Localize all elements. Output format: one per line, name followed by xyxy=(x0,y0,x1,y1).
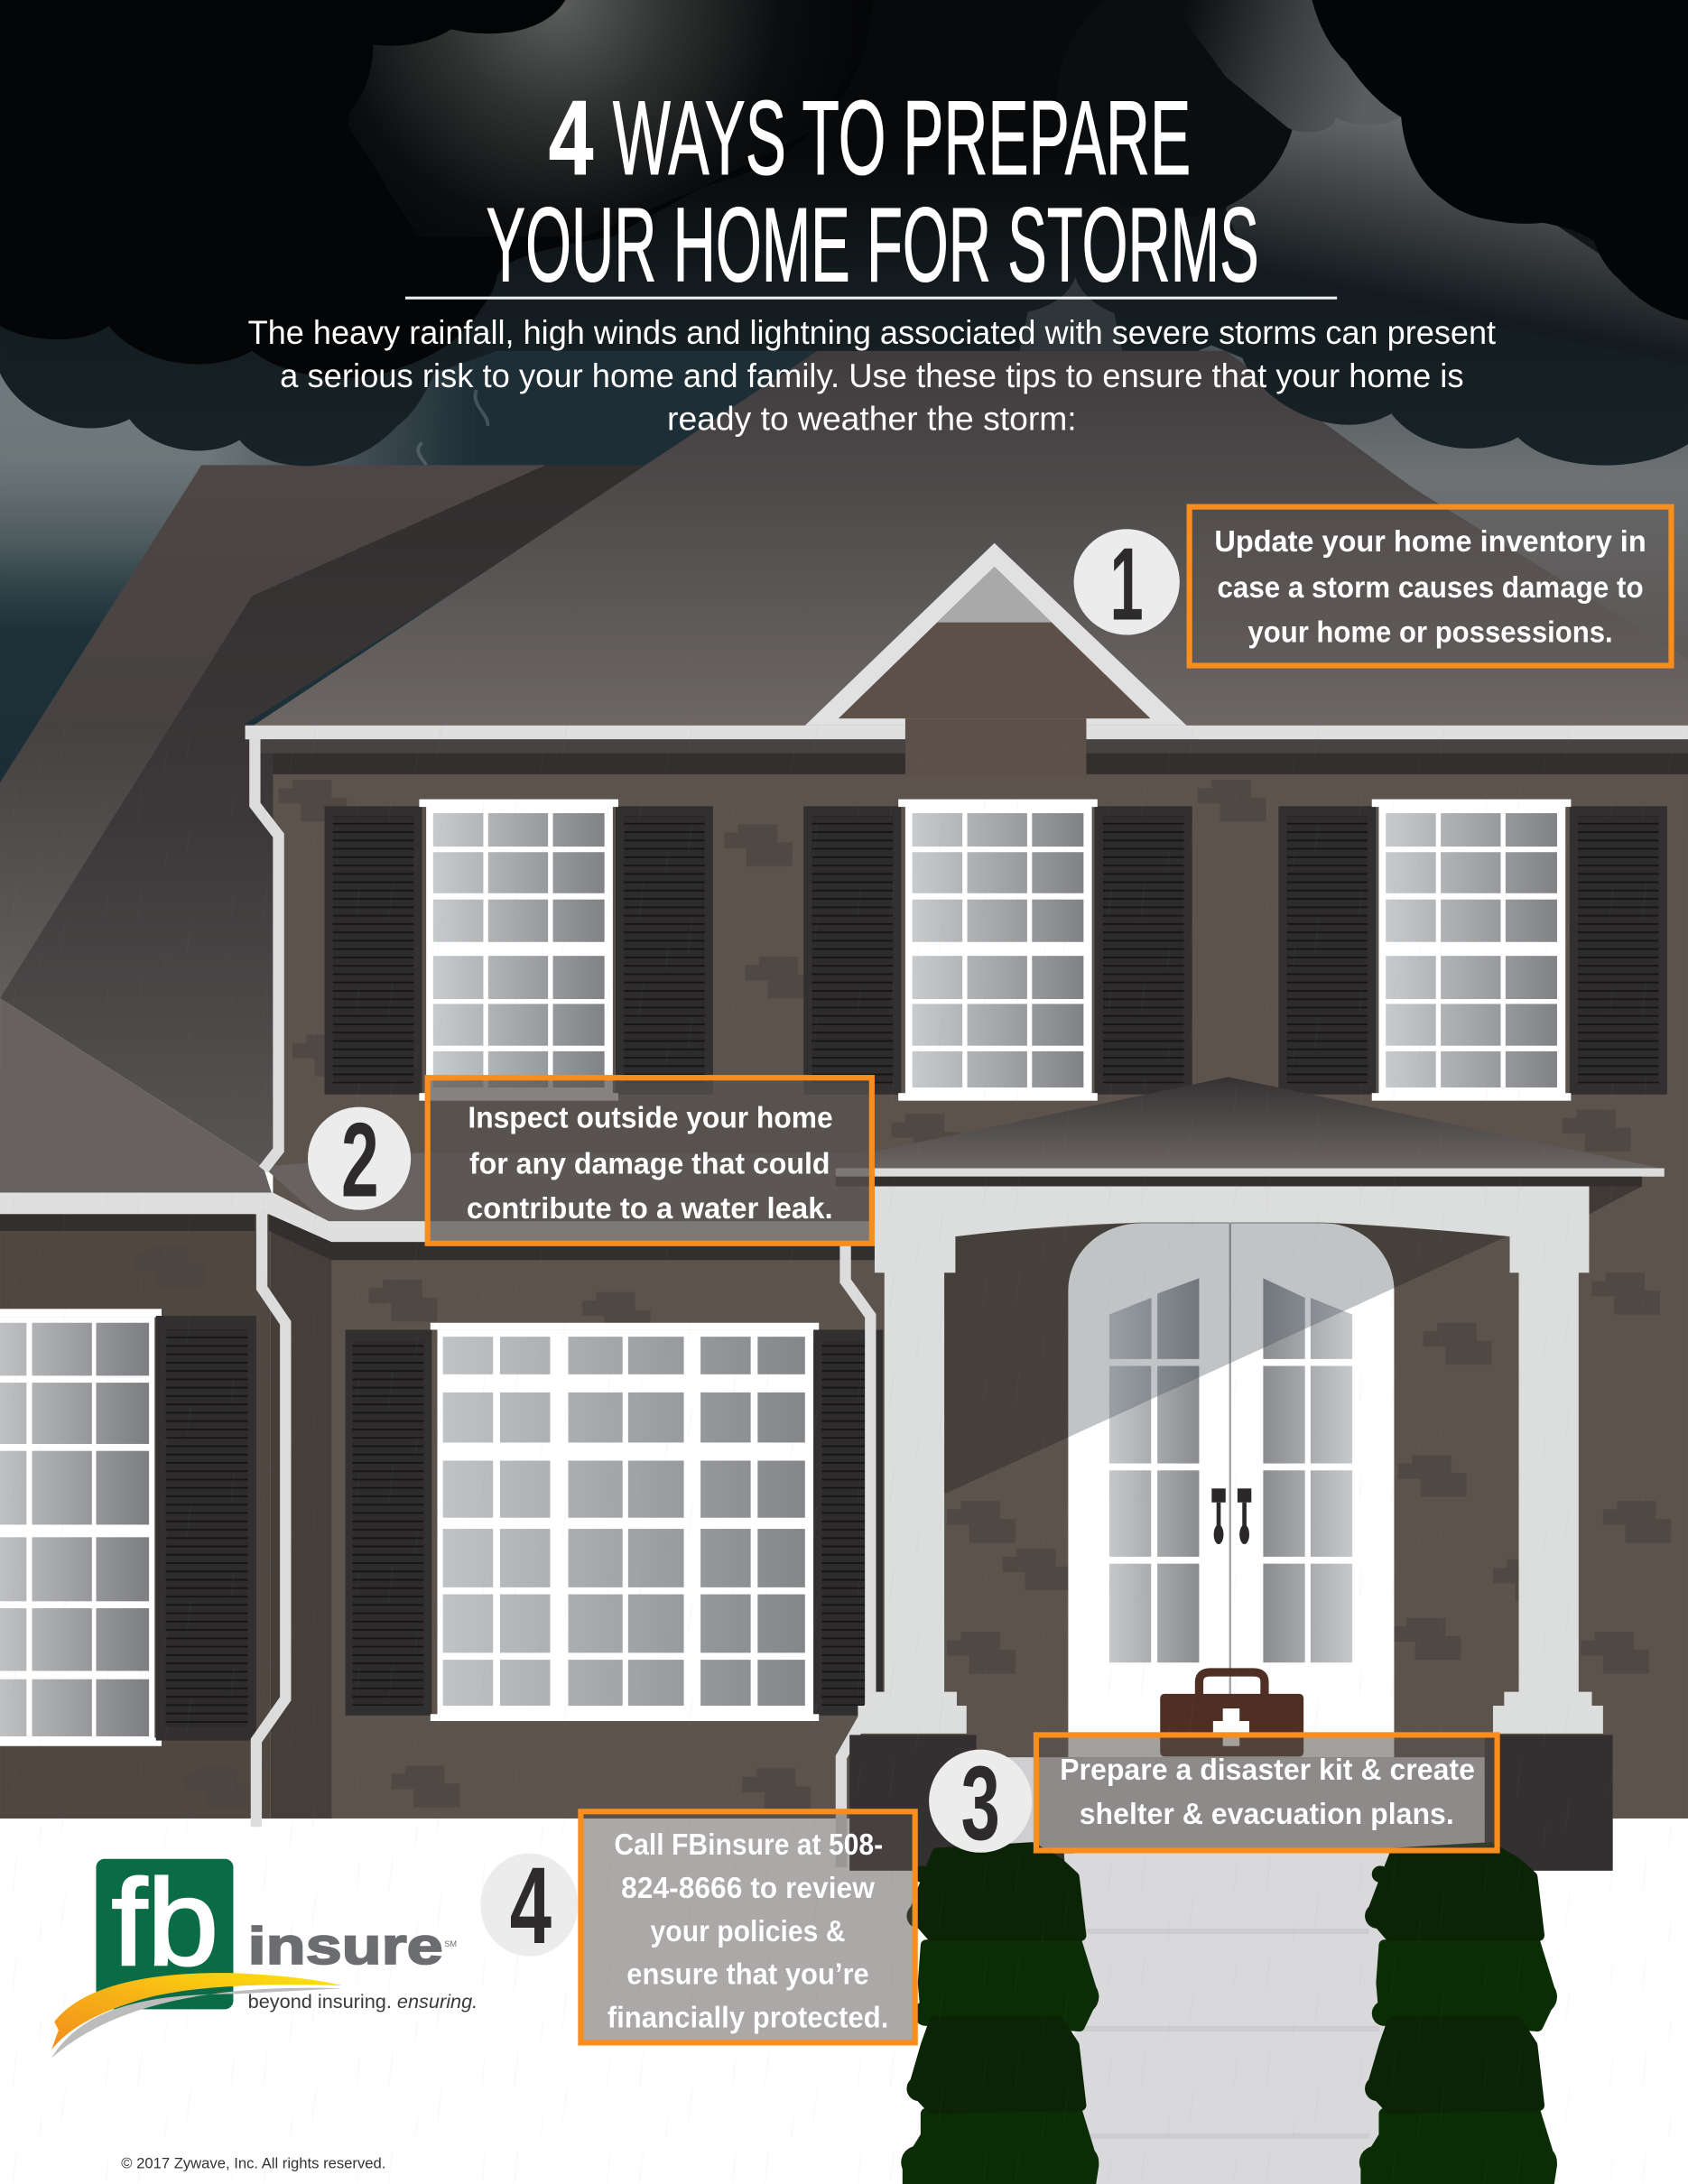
tip 4 xyxy=(480,1811,915,2042)
door panes right xyxy=(1263,1278,1352,1662)
number badge 2: 2 xyxy=(341,1100,379,1218)
roof: dark valley strip xyxy=(0,465,654,1167)
wall: main brick xyxy=(273,752,1688,1818)
cloud: upper right grey gap xyxy=(1170,0,1401,132)
cloud: top left black lobes xyxy=(0,0,565,195)
brick patches xyxy=(135,780,1671,1810)
callout text 2: for any damage that could xyxy=(469,1148,830,1181)
cloud: lower right grey gap xyxy=(1226,111,1688,365)
callout text 4: ensure that you’re xyxy=(626,1958,869,1992)
house walls xyxy=(0,752,1688,1818)
window 2 xyxy=(803,800,1192,1101)
logo green tile xyxy=(96,1859,233,2009)
callout text 2: contribute to a water leak. xyxy=(467,1192,833,1226)
gable fill xyxy=(805,543,1187,726)
gable and main eaves xyxy=(246,543,1688,777)
rain overlay xyxy=(0,724,1688,2183)
tip 1 xyxy=(1074,507,1671,665)
callout text 1: your home or possessions. xyxy=(1247,615,1613,649)
callout text 4: your policies & xyxy=(651,1915,846,1948)
title rule xyxy=(405,297,1337,300)
callout box 1 xyxy=(1190,507,1671,665)
door xyxy=(1068,1222,1394,1757)
door panes left xyxy=(1109,1278,1199,1662)
number badge 1 xyxy=(1074,528,1180,643)
ground xyxy=(0,1817,1688,2184)
logo swoosh shadow xyxy=(51,1988,343,2058)
callout text 4: 824-8666 to review xyxy=(621,1872,875,1905)
number badge 1: 1 xyxy=(1110,528,1144,643)
callout text 1: Update your home inventory in xyxy=(1214,525,1646,559)
logo wordmark: insure xyxy=(248,1918,443,1976)
cloud: main black bank xyxy=(0,0,873,378)
porch xyxy=(793,1077,1665,1757)
callout box 2 xyxy=(428,1078,872,1244)
cloud: rear teal bank xyxy=(0,0,1688,466)
cloud: front black right xyxy=(1312,0,1688,320)
cloud: grey peak behind title xyxy=(1019,277,1123,351)
callout text 3 xyxy=(1060,1754,1475,1831)
roof: back left wing band xyxy=(0,465,546,998)
number badge 3 xyxy=(929,1744,1032,1862)
callout text 4: financially protected. xyxy=(607,2001,888,2034)
eaves dark xyxy=(261,739,905,754)
title: 4 xyxy=(549,79,593,197)
callout box 3 xyxy=(1036,1735,1498,1850)
door handles xyxy=(1211,1488,1251,1544)
upper windows with shutters xyxy=(325,800,1667,1101)
lightning bolt xyxy=(418,390,487,465)
cloud: dark lobe right of title xyxy=(1057,0,1296,217)
intro paragraph xyxy=(248,313,1497,438)
number badge 3: 3 xyxy=(961,1744,1000,1862)
left column xyxy=(858,1187,967,1734)
foundation and steps xyxy=(849,1735,1613,2184)
storm clouds xyxy=(0,0,1688,466)
callout text 2 xyxy=(467,1102,833,1226)
logo tagline: beyond insuring. ensuring. xyxy=(248,1990,478,2013)
entablature xyxy=(875,1187,1589,1236)
title: WAYS TO PREPARE xyxy=(613,79,1191,197)
intro paragraph: a serious risk to your home and family. Use these tips to ensure that your home is xyxy=(280,356,1464,394)
window 1 xyxy=(325,800,713,1101)
left wing window xyxy=(0,1309,256,1746)
cloud: top centre grey gap xyxy=(348,0,873,236)
sky background xyxy=(0,306,1688,836)
logo fb letters: fb xyxy=(111,1854,218,1991)
roof: lower left slope xyxy=(0,998,273,1198)
callout box 4 xyxy=(580,1811,915,2042)
callout text 1 xyxy=(1214,525,1646,649)
porch roof xyxy=(793,1077,1665,1169)
number badge 4: 4 xyxy=(510,1845,552,1967)
callout text 1: case a storm causes damage to xyxy=(1217,571,1644,605)
window 3 xyxy=(1278,800,1667,1101)
door shadow overlay xyxy=(1069,1223,1394,1437)
number badge 4 xyxy=(480,1845,578,1967)
porch eave xyxy=(836,1168,1665,1177)
eaves white xyxy=(246,726,905,739)
logo: FBinsure xyxy=(51,1854,478,2058)
right column xyxy=(1493,1187,1603,1734)
logo swoosh xyxy=(51,1973,343,2050)
intro paragraph: The heavy rainfall, high winds and lightning associated with severe storms can present xyxy=(248,313,1497,351)
roof: small lower skirt xyxy=(264,1153,891,1226)
intro paragraph: ready to weather the storm: xyxy=(667,400,1077,438)
shrub left xyxy=(901,1847,1099,2183)
copyright: © 2017 Zywave, Inc. All rights reserved. xyxy=(121,2155,385,2171)
roofs xyxy=(0,351,1688,1198)
lower eaves xyxy=(0,1192,877,1260)
number badge 2 xyxy=(308,1100,411,1218)
gutters and downspouts xyxy=(255,738,870,1867)
walkway xyxy=(1064,1854,1390,2184)
shutter xyxy=(156,1316,256,1741)
logo service mark: SM xyxy=(444,1939,457,1948)
wall: wing xyxy=(0,1211,270,1818)
tip 3 xyxy=(929,1735,1498,1862)
callout text 4 xyxy=(607,1828,888,2034)
callout text 2: Inspect outside your home xyxy=(468,1102,833,1135)
callout text 3: shelter & evacuation plans. xyxy=(1080,1798,1454,1831)
shrub right xyxy=(1359,1847,1557,2183)
icon: first-aid kit xyxy=(1160,1672,1303,1756)
title xyxy=(486,79,1259,304)
callout text 4: Call FBinsure at 508- xyxy=(614,1828,883,1862)
porch shadow xyxy=(944,1223,1509,1495)
tip 2 xyxy=(308,1078,872,1244)
roof: main slope xyxy=(246,351,1688,731)
large lower window xyxy=(346,1323,883,1721)
callout text 3: Prepare a disaster kit & create xyxy=(1060,1754,1475,1787)
